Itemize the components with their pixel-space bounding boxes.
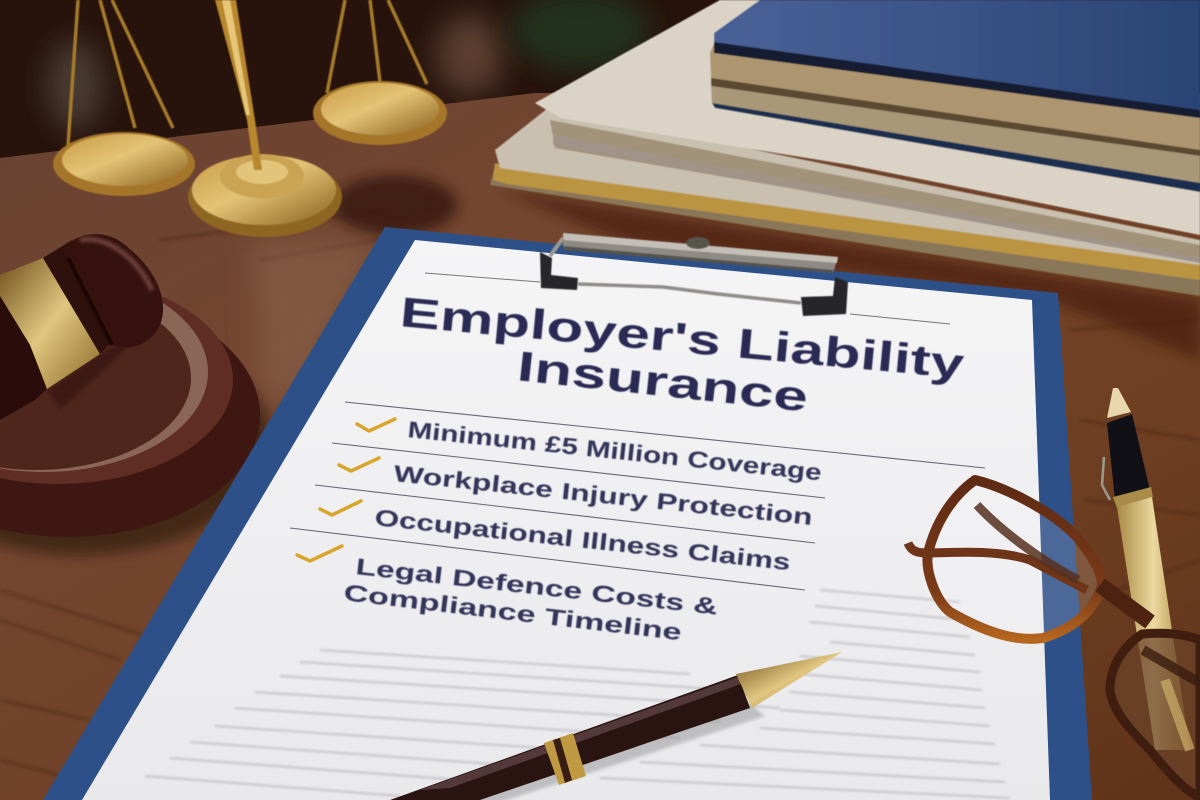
gavel head [0, 234, 163, 420]
list text: Minimum £5 Million Coverage [406, 416, 823, 485]
right pan [327, 0, 427, 93]
base [188, 157, 342, 237]
metal clip [540, 233, 848, 316]
checklist [290, 402, 985, 645]
list text: Compliance Timeline [342, 579, 683, 645]
gold pen at right [1102, 388, 1190, 750]
title: Insurance [515, 342, 810, 420]
list text [342, 416, 823, 645]
list text: Occupational Illness Claims [373, 504, 792, 575]
icon: brass scales [53, 0, 447, 237]
title [398, 288, 967, 420]
list text: Legal Defence Costs & [354, 553, 719, 620]
gavel and sounding block [0, 234, 270, 555]
left pan [68, 0, 173, 146]
faint header scribble [425, 273, 950, 324]
list text: Workplace Injury Protection [392, 460, 814, 530]
reading glasses [908, 480, 1200, 798]
stack of folders and books [490, 0, 1200, 296]
icon: check marks [297, 419, 395, 561]
sounding block [0, 293, 260, 537]
fountain pen on paper [390, 652, 842, 800]
paper sheet [82, 240, 1050, 800]
fine print block [145, 590, 1010, 798]
title: Employer's Liability [398, 288, 967, 387]
clipboard [43, 227, 1092, 800]
